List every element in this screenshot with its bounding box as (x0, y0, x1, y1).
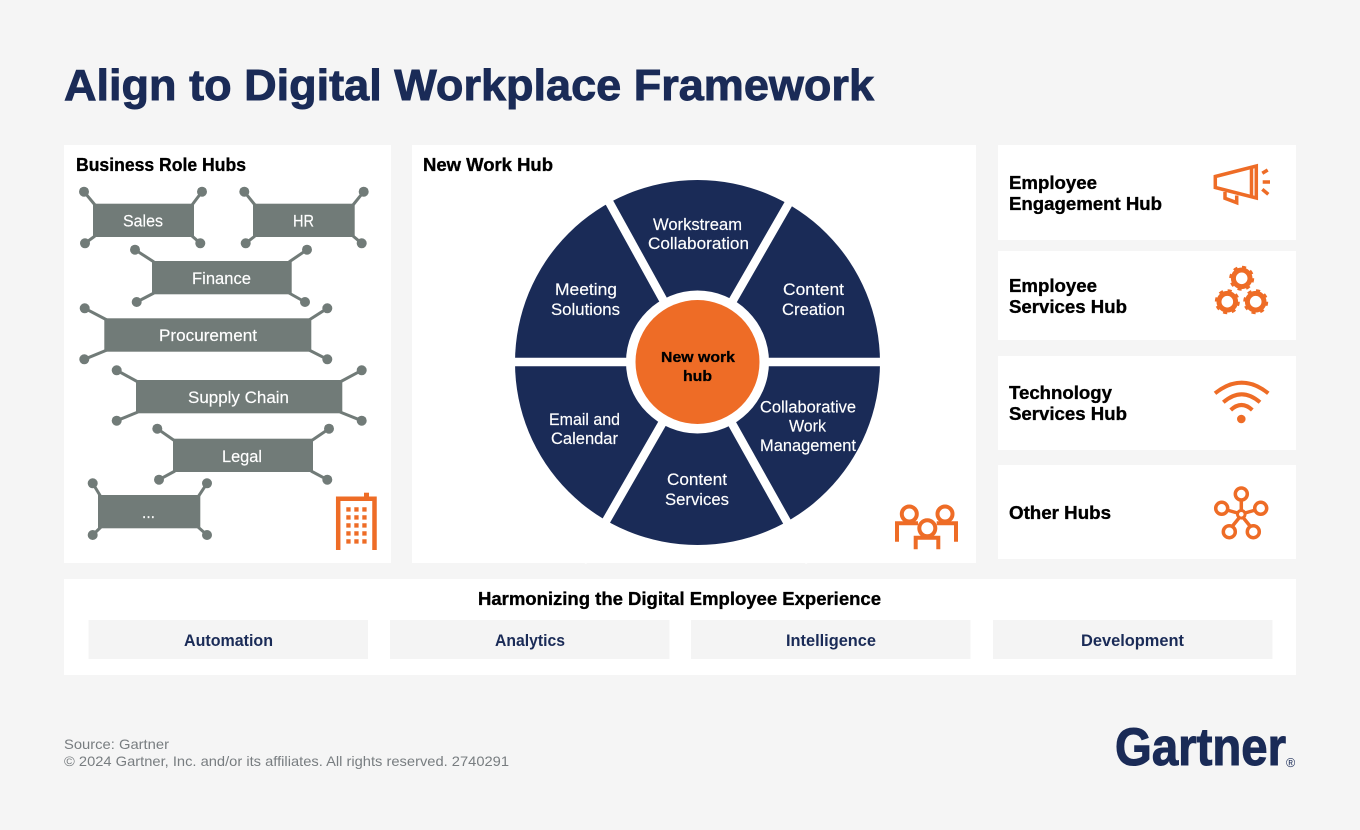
icon: wifi (1215, 383, 1268, 423)
segment: collaborative work management: Collaborative (760, 399, 856, 417)
panel: business role hubs (64, 145, 391, 563)
segment: content services: Services (665, 491, 729, 509)
chip: automation (88, 620, 368, 659)
icon: people (897, 506, 956, 549)
chip: intelligence: Intelligence (786, 632, 876, 650)
hub: supply chain: Supply Chain (188, 389, 289, 407)
icon: network (1216, 488, 1267, 538)
segment: content creation: Creation (782, 301, 845, 319)
hub: finance: Finance (192, 270, 251, 288)
panel: employee engagement hub (998, 145, 1296, 240)
chip: automation: Automation (184, 632, 273, 650)
chip: analytics: Analytics (495, 632, 565, 650)
hub: legal: Legal (222, 448, 262, 466)
wheel centre: new work hub: New work (661, 349, 736, 366)
icon: office building (338, 493, 374, 550)
chip: analytics (390, 620, 670, 659)
panel: technology services hub: Services Hub (1009, 403, 1127, 424)
panel: technology services hub (998, 356, 1296, 450)
hub: HR (239, 187, 369, 248)
title: Align to Digital Workplace Framework (64, 61, 875, 110)
segment: content creation: Content (783, 281, 844, 299)
panel: employee engagement hub: Engagement Hub (1009, 193, 1162, 214)
segment: collaborative work management: Work (789, 418, 827, 436)
hub: procurement (79, 303, 332, 364)
hub: more (88, 478, 212, 540)
hub: finance (130, 245, 312, 307)
heading: harmonizing: Harmonizing the Digital Employee Experience (478, 588, 881, 609)
segment: meeting solutions: Solutions (551, 301, 620, 319)
wheel centre: new work hub: hub (683, 368, 712, 385)
segment: workstream collaboration: Collaboration (648, 235, 749, 253)
segment: workstream collaboration: Workstream (653, 216, 742, 234)
logo: Gartner: ® (1286, 756, 1296, 770)
heading: business role hubs: Business Role Hubs (76, 154, 246, 175)
chip: development (993, 620, 1272, 659)
wheel chart (505, 162, 890, 562)
panel: employee services hub (998, 251, 1296, 340)
heading: new work hub: New Work Hub (423, 154, 553, 175)
icon: megaphone (1215, 166, 1270, 203)
panel: employee services hub: Services Hub (1009, 296, 1127, 317)
segment: meeting solutions: Meeting (555, 281, 617, 299)
chip: intelligence (691, 620, 970, 659)
panel: harmonizing the digital employee experience (64, 579, 1296, 675)
chip: development: Development (1081, 632, 1185, 650)
hub: more: ... (142, 504, 155, 522)
panel: employee engagement hub: Employee (1009, 172, 1097, 193)
wheel centre: new work hub (636, 300, 760, 424)
segment: collaborative work management: Management (760, 437, 856, 455)
icon: gears (1216, 267, 1267, 313)
panel: other hubs: Other Hubs (1009, 502, 1111, 523)
segment: email and calendar: Calendar (551, 430, 618, 448)
segment: content services: Content (667, 471, 727, 489)
hub: sales: Sales (123, 212, 163, 230)
panel: employee services hub: Employee (1009, 275, 1097, 296)
segment: email and calendar: Email and (549, 411, 620, 429)
hub: procurement: Procurement (159, 327, 257, 345)
hub: sales (79, 187, 207, 248)
footer source text: Source: Gartner (64, 736, 169, 752)
panel: new work hub (412, 145, 976, 563)
hub: HR: HR (293, 212, 314, 230)
panel: technology services hub: Technology (1009, 382, 1113, 403)
panel: other hubs (998, 465, 1296, 559)
footer source text (64, 736, 509, 769)
hub: legal (152, 424, 334, 485)
footer source text: © 2024 Gartner, Inc. and/or its affiliates. All rights reserved. 2740291 (64, 753, 509, 769)
hub: supply chain (112, 365, 367, 426)
logo: Gartner: Gartner (1115, 718, 1286, 777)
